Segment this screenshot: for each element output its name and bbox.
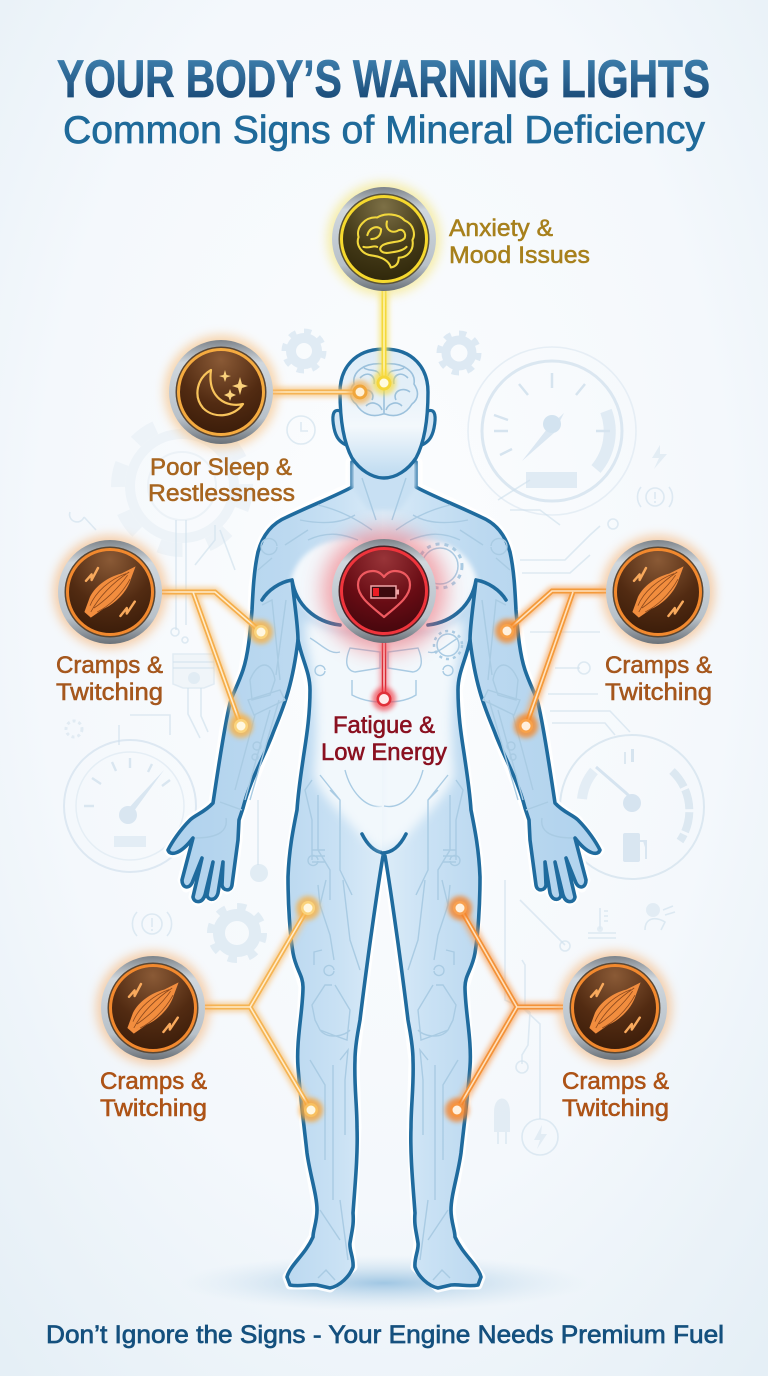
label: cramps right leg: Cramps &	[562, 1068, 669, 1095]
label: cramps left arm: Twitching	[56, 679, 163, 706]
label: poor sleep	[148, 454, 295, 507]
big gear left	[118, 422, 246, 550]
connector: anxiety to brain	[372, 290, 396, 395]
icon: muscle	[127, 982, 179, 1034]
groin line	[362, 834, 386, 853]
badge: anxiety brain	[327, 182, 441, 296]
label: fatigue	[321, 712, 447, 766]
left gauge	[64, 740, 196, 872]
brain dot orange	[348, 380, 372, 404]
warning icon lower left	[132, 912, 172, 936]
label: cramps left leg	[100, 1068, 207, 1122]
label: fatigue: Fatigue &	[333, 712, 435, 739]
circuit traces	[70, 480, 630, 1119]
badge: cramps right leg	[558, 951, 672, 1065]
label: anxiety: Mood Issues	[449, 242, 590, 269]
clock	[287, 416, 315, 444]
label: cramps left leg: Cramps &	[100, 1068, 207, 1095]
right fuel gauge	[560, 735, 704, 879]
temperature icon	[588, 908, 616, 938]
badge: sleep moon	[164, 335, 278, 449]
human body figure	[168, 349, 600, 1288]
circle node	[250, 864, 268, 882]
ground shadow	[179, 1255, 589, 1311]
icon: moon and stars	[197, 370, 248, 415]
badge: cramps left leg	[96, 951, 210, 1065]
label: anxiety	[449, 215, 590, 269]
label: cramps left arm: Cramps &	[56, 652, 163, 679]
chest and abdomen gears	[418, 544, 462, 659]
connector: right arm	[495, 591, 607, 738]
icon: muscle	[84, 566, 136, 618]
speedometer	[468, 347, 636, 515]
icon: muscle	[632, 566, 684, 618]
gear upper left	[285, 332, 323, 370]
badge: cramps right arm	[601, 535, 715, 649]
label: cramps right arm: Cramps &	[605, 652, 712, 679]
decorative engine background	[64, 332, 704, 1155]
right half of body	[378, 462, 600, 1288]
label: fatigue: Low Energy	[321, 739, 447, 766]
connector: left leg	[205, 896, 323, 1122]
subtitle: Common Signs of Mineral Deficiency	[63, 109, 706, 152]
abdominal muscles	[347, 648, 421, 702]
small cog icon left	[66, 721, 82, 737]
seatbelt person icon	[645, 903, 675, 930]
gear lower left	[211, 907, 263, 959]
brain dot yellow	[372, 371, 396, 395]
icon: brain	[358, 214, 414, 267]
lightning icon	[652, 445, 667, 469]
head	[340, 349, 428, 478]
label: cramps right arm	[605, 652, 712, 706]
icon: heart with battery	[358, 571, 410, 617]
badge: fatigue heart	[322, 529, 446, 653]
badge: cramps left arm	[53, 535, 167, 649]
connector: heart to fatigue label	[372, 642, 396, 711]
central torso highlight	[306, 620, 390, 850]
connector: right leg	[445, 896, 563, 1122]
armpit and chest lines	[262, 580, 340, 640]
footer tagline: Don’t Ignore the Signs - Your Engine Needs Premium Fuel	[46, 1321, 724, 1349]
gear upper right	[440, 334, 478, 372]
plug icon	[494, 1098, 510, 1144]
bolt icon	[522, 1119, 558, 1155]
brain in head	[350, 364, 418, 416]
ears	[333, 410, 346, 445]
label: cramps right leg: Twitching	[562, 1095, 669, 1122]
circuit details	[195, 515, 358, 838]
piston	[173, 654, 214, 738]
label: cramps left leg: Twitching	[100, 1095, 207, 1122]
label: poor sleep: Restlessness	[148, 480, 295, 507]
warning icon right	[637, 487, 673, 507]
left half of body	[168, 462, 390, 1288]
pectoral	[290, 539, 390, 630]
label: cramps left arm	[56, 652, 163, 706]
connector: left arm	[162, 592, 273, 738]
label: cramps right leg	[562, 1068, 669, 1122]
label: anxiety: Anxiety &	[449, 215, 553, 242]
neck shading	[352, 462, 416, 510]
icon: muscle	[589, 982, 641, 1034]
label: poor sleep: Poor Sleep &	[150, 454, 292, 481]
label: cramps right arm: Twitching	[605, 679, 712, 706]
connector: sleep to brain	[272, 380, 372, 404]
